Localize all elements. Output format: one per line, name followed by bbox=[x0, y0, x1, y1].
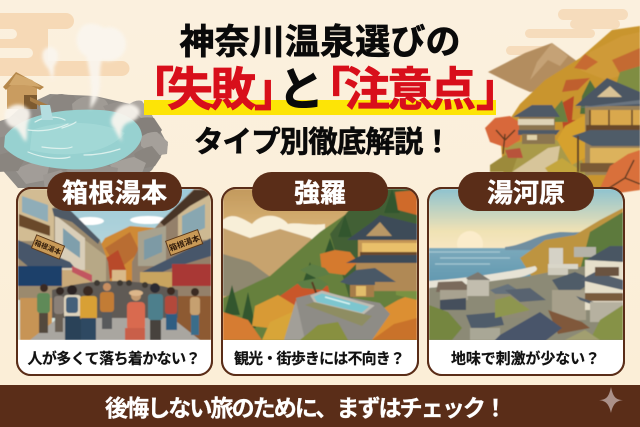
small ryokan bbox=[513, 105, 560, 144]
title line 2: と bbox=[278, 64, 324, 116]
label pill: 強羅 bbox=[294, 178, 346, 208]
title line 2: 「注意点」 bbox=[304, 64, 522, 116]
ryokan bbox=[340, 215, 417, 297]
title line 3: タイプ別徹底解説！ bbox=[194, 126, 452, 159]
sign: left bbox=[31, 235, 65, 259]
caption: 人が多くて落ち着かない？ bbox=[28, 350, 200, 368]
footer banner bbox=[0, 385, 640, 427]
pine tree bbox=[296, 264, 330, 290]
caption: 地味で刺激が少ない？ bbox=[451, 350, 600, 368]
decorative clouds right bbox=[506, 9, 628, 55]
title line 2: 「失敗」 bbox=[128, 64, 300, 116]
title line 2 bbox=[128, 64, 522, 116]
crowd bbox=[37, 280, 200, 340]
label pill bbox=[252, 172, 388, 211]
icon: sparkle bbox=[599, 387, 623, 413]
main ryokan bbox=[572, 78, 640, 175]
caption bbox=[18, 340, 211, 374]
houses bbox=[429, 246, 623, 345]
label pill bbox=[458, 172, 594, 211]
panel: Hakone Yumoto bbox=[17, 172, 212, 375]
autumn trees bbox=[223, 250, 417, 340]
mountain scene bbox=[223, 189, 417, 345]
autumn hillside bbox=[500, 26, 640, 190]
steam clouds bbox=[4, 24, 140, 142]
title line 1: 神奈川温泉選びの bbox=[180, 23, 460, 62]
distant hotels bbox=[548, 247, 596, 275]
caption bbox=[429, 340, 623, 374]
caption: 観光・街歩きには不向き？ bbox=[234, 350, 405, 368]
rock cliff bbox=[288, 292, 390, 340]
far mountain bbox=[488, 43, 590, 92]
path and bushes bbox=[512, 146, 560, 174]
sign: left: 箱根湯本 bbox=[33, 238, 62, 257]
label pill: 湯河原 bbox=[487, 178, 565, 208]
lower slope bbox=[505, 140, 590, 190]
icon: wooden spring hut bbox=[3, 72, 48, 109]
sign: right: 箱根湯本 bbox=[168, 233, 201, 253]
tree: small red maple bbox=[485, 116, 522, 148]
illustration: hot spring pool bbox=[0, 24, 168, 190]
highlight bar bbox=[144, 100, 496, 115]
panel: Gora bbox=[222, 172, 418, 375]
street scene bbox=[18, 189, 211, 340]
title bbox=[128, 23, 522, 159]
onsen pool bbox=[312, 292, 372, 314]
rock rim bbox=[0, 94, 168, 190]
decorative clouds left bbox=[0, 13, 130, 76]
illustration: autumn mountain and ryokan bbox=[485, 26, 640, 194]
sign: right bbox=[166, 230, 203, 255]
label pill: 箱根湯本 bbox=[62, 178, 167, 208]
water bbox=[4, 110, 142, 169]
tree: foreground maple bbox=[600, 150, 640, 194]
water spout bbox=[40, 105, 53, 120]
coastal town scene bbox=[429, 189, 623, 345]
panel: Yugawara bbox=[428, 172, 624, 375]
caption bbox=[223, 340, 417, 374]
label pill bbox=[47, 172, 182, 211]
footer text: 後悔しない旅のために、まずはチェック！ bbox=[105, 395, 507, 421]
